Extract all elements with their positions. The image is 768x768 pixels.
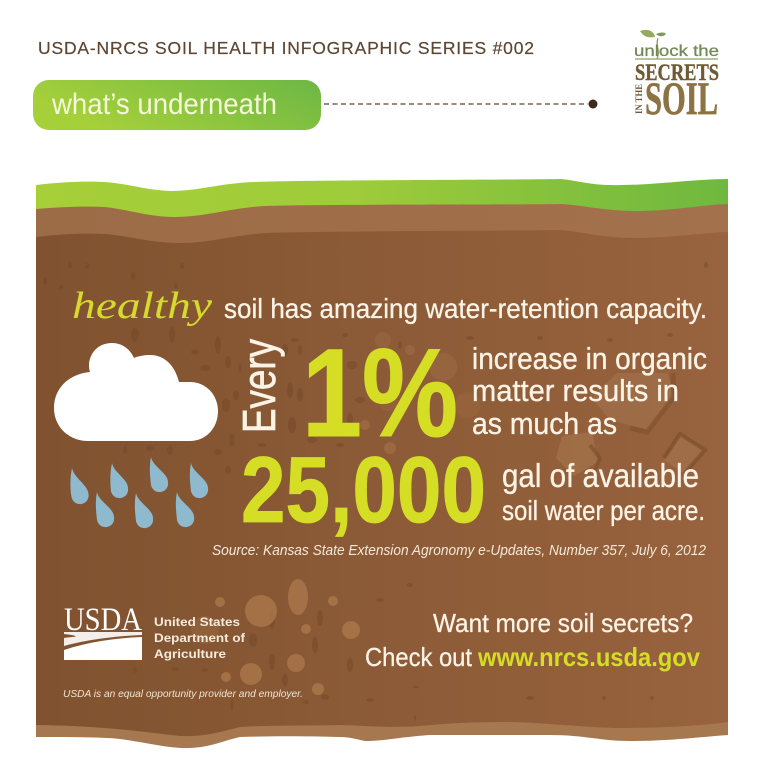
- USDA logo: USDA: [64, 602, 142, 638]
- grass layer: [36, 179, 728, 250]
- soil hexagon pebbles: [556, 373, 705, 476]
- statistic: 25,000: 25,000: [241, 437, 486, 542]
- rain drops: [70, 457, 208, 528]
- icon: rain cloud: [54, 343, 218, 528]
- agency name: [154, 615, 246, 661]
- agency name: United States: [154, 615, 240, 629]
- section label pill with connector: [33, 80, 598, 130]
- call to action: Check out: [365, 642, 473, 672]
- heading: healthy soil: healthy: [72, 285, 212, 327]
- statistic: every 1%: [233, 324, 458, 463]
- text: gallons of available soil water: [502, 457, 705, 526]
- panel: soil cross-section: [36, 179, 728, 748]
- statistic: every 1%: 1%: [302, 324, 458, 463]
- agency name: Agriculture: [154, 647, 226, 661]
- soil pebbles: [191, 332, 481, 695]
- call to action: www.nrcs.usda.gov: [477, 642, 700, 672]
- text: increase in organic matter: [472, 341, 707, 441]
- section label pill with connector: what’s underneath: [51, 88, 277, 121]
- statistic: every 1%: Every: [233, 339, 285, 433]
- heading: healthy soil: [72, 285, 707, 327]
- text: gallons of available soil water: soil water per acre.: [502, 495, 705, 526]
- header series title: USDA-NRCS SOIL HEALTH INFOGRAPHIC SERIES #002: [38, 38, 534, 58]
- equal opportunity statement: USDA is an equal opportunity provider and employer.: [63, 688, 303, 700]
- subsoil light layer: [36, 204, 728, 260]
- logo: unlock the secrets in the soil: SECRETS: [635, 60, 719, 85]
- text: increase in organic matter: matter results in: [472, 373, 679, 408]
- bottom soil band: [36, 700, 728, 748]
- text: increase in organic matter: as much as: [472, 406, 617, 441]
- main soil layer: [36, 230, 728, 736]
- USDA logo: [64, 602, 246, 661]
- source citation: Source: Kansas State Extension Agronomy e-Updates, Number 357, July 6, 2012: [212, 543, 706, 559]
- soil specks: [43, 262, 708, 721]
- logo: unlock the secrets in the soil: unlock the: [634, 43, 719, 60]
- logo: unlock the secrets in the soil: IN THE: [635, 84, 645, 114]
- heading: healthy soil: soil has amazing water-retention capacity.: [224, 293, 707, 324]
- text: increase in organic matter: increase in organic: [472, 341, 707, 376]
- logo: unlock the secrets in the soil: [634, 30, 719, 125]
- logo: unlock the secrets in the soil: SOIL: [645, 73, 718, 125]
- agency name: Department of: [154, 631, 246, 645]
- call to action: [365, 608, 700, 672]
- call to action: Want more soil secrets?: [433, 608, 693, 638]
- text: gallons of available soil water: gal of available: [502, 457, 699, 494]
